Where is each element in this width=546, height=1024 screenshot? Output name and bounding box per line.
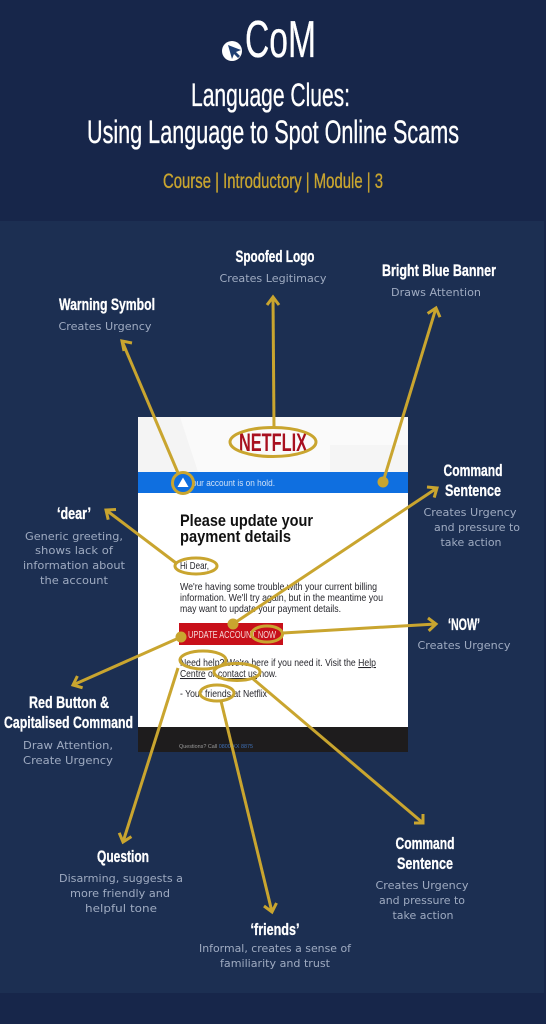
header	[87, 11, 459, 193]
logo ring and arrow	[230, 297, 316, 456]
red button dot and arrow	[73, 632, 186, 688]
label: bright blue banner: Bright Blue Banner	[382, 261, 496, 280]
label: friends: Informal, creates a sense of	[199, 942, 352, 955]
email screenshot	[138, 417, 408, 752]
email body	[180, 560, 383, 615]
help text: Need help? We're here if you need it. Visit the Help	[180, 657, 376, 669]
email body: information. We'll try again, but in the meantime you	[180, 592, 383, 604]
now ring and arrow	[252, 618, 436, 642]
email body: may want to update your payment details.	[180, 603, 341, 615]
label: red button	[4, 693, 133, 767]
red button	[179, 623, 283, 645]
main panel	[0, 221, 544, 993]
contact ring and arrow	[214, 664, 423, 823]
label: spoofed logo: Spoofed Logo	[236, 247, 314, 266]
dear ring and arrow	[106, 510, 217, 574]
label: command sentence upper: Command	[444, 461, 502, 480]
label: friends: familiarity and trust	[220, 957, 331, 970]
label: bright blue banner	[382, 261, 496, 299]
label: warning symbol: Creates Urgency	[58, 320, 152, 333]
label: dear: the account	[40, 574, 109, 587]
logo: CoM	[245, 11, 316, 69]
label: dear	[23, 504, 126, 587]
label: dear: ‘dear’	[57, 504, 91, 523]
label: dear: shows lack of	[35, 544, 114, 557]
label: dear: Generic greeting,	[25, 530, 123, 543]
banner dot and arrow	[378, 308, 440, 488]
label: warning symbol	[58, 295, 155, 333]
friends ring and arrow	[200, 685, 276, 912]
label: now: Creates Urgency	[418, 639, 511, 652]
email heading: payment details	[180, 528, 291, 546]
label: red button: Draw Attention,	[23, 739, 113, 752]
email heading: Please update your	[180, 512, 314, 530]
label: warning symbol: Warning Symbol	[59, 295, 155, 314]
question ring and arrow	[119, 651, 226, 842]
email body: We're having some trouble with your current billing	[180, 581, 377, 593]
label: spoofed logo	[220, 247, 327, 285]
label: command sentence lower: Sentence	[397, 854, 453, 873]
email header band	[138, 417, 408, 472]
blue banner: our account is on hold.	[192, 478, 275, 489]
callout rings and connector arrows	[73, 297, 440, 912]
blue banner	[138, 472, 408, 493]
email footer: Questions? Call 0800 XX 8875	[179, 744, 253, 750]
label: question	[59, 847, 183, 915]
email footer	[138, 727, 408, 752]
logo	[222, 11, 316, 69]
label: red button: Capitalised Command	[4, 713, 133, 732]
label: friends: ‘friends’	[250, 920, 300, 939]
label: command sentence lower: Command	[396, 834, 454, 853]
label: command sentence lower: Creates Urgency	[376, 879, 469, 892]
label: now: ‘NOW’	[448, 615, 480, 634]
red button: UPDATE ACCOUNT NOW	[188, 630, 276, 641]
label: bright blue banner: Draws Attention	[391, 286, 481, 299]
label: question: helpful tone	[85, 902, 157, 915]
warning symbol marker and arrow	[122, 341, 194, 494]
label: red button: Red Button &	[29, 693, 109, 712]
label: command sentence lower: and pressure to	[379, 894, 465, 907]
label: dear: information about	[23, 559, 126, 572]
label: command sentence upper: Sentence	[445, 481, 501, 500]
label: command sentence upper: take action	[440, 536, 502, 549]
label: question: Disarming, suggests a	[59, 872, 183, 885]
email heading	[180, 512, 314, 546]
label: command sentence upper	[424, 461, 520, 549]
netflix logo: NETFLIX	[239, 429, 307, 457]
label: now	[418, 615, 511, 652]
command sentence dot and arrow	[228, 487, 437, 630]
help text: - Your friends at Netflix	[180, 688, 268, 700]
label: command sentence upper: Creates Urgency	[424, 506, 517, 519]
help text: Centre or contact us now.	[180, 668, 277, 680]
label: question: more friendly and	[70, 887, 170, 900]
title	[87, 77, 459, 150]
label: command sentence lower	[376, 834, 469, 922]
label: command sentence upper: and pressure to	[434, 521, 520, 534]
label: command sentence lower: take action	[392, 909, 454, 922]
help text	[180, 657, 376, 700]
label: question: Question	[97, 847, 149, 866]
subtitle: Course | Introductory | Module | 3	[163, 170, 383, 193]
label: red button: Create Urgency	[23, 754, 114, 767]
label: friends	[199, 920, 352, 970]
label: spoofed logo: Creates Legitimacy	[220, 272, 327, 285]
title: Language Clues:	[191, 77, 350, 113]
email body: Hi Dear,	[180, 560, 209, 572]
